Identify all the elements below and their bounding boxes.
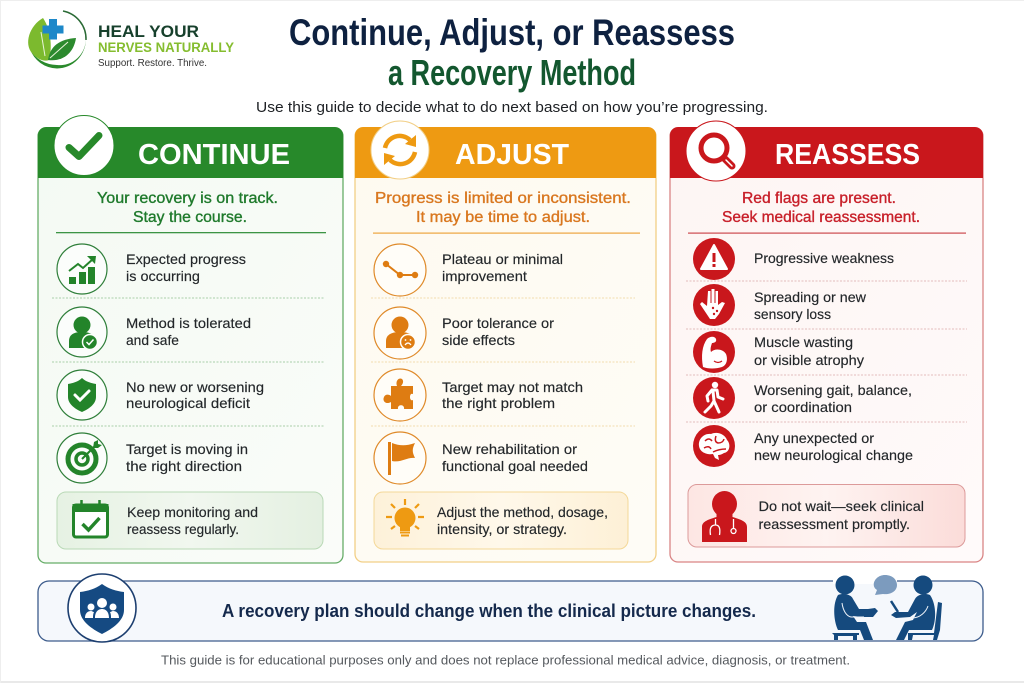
- header band: [670, 127, 983, 178]
- summary: Stay the course.: [133, 209, 247, 226]
- title: [289, 12, 735, 93]
- disclaimer: This guide is for educational purposes only and does not replace professional medical advice, diagnosis, or treatment.: [161, 654, 850, 668]
- item: progressive weakness: [693, 238, 894, 280]
- item: sensory loss: [693, 284, 867, 326]
- logo text: HEAL YOUR: [98, 22, 199, 41]
- item: progressive weakness: Progressive weakness: [754, 250, 894, 266]
- item: expected progress: is occurring: [126, 268, 200, 284]
- item: worsening gait: or coordination: [754, 399, 852, 415]
- item: plateau: [374, 244, 563, 296]
- icon: magnifier badge: [686, 121, 746, 181]
- item: poor tolerance: [374, 307, 554, 359]
- icon: light bulb: [386, 499, 424, 536]
- banner message: A recovery plan should change when the clinical picture changes.: [222, 601, 756, 621]
- callout: do not wait: [688, 484, 965, 547]
- logo: Heal Your Nerves Naturally: [28, 11, 234, 69]
- item: new goal: functional goal needed: [442, 458, 588, 474]
- item: sensory loss: Spreading or new: [754, 289, 867, 305]
- item: target mismatch: the right problem: [442, 395, 555, 411]
- heading: CONTINUE: [138, 139, 290, 171]
- logo text: [98, 22, 234, 69]
- callout: adjust the method: [374, 492, 628, 549]
- item: target moving: [57, 433, 248, 483]
- item: worsening gait: Worsening gait, balance,: [754, 382, 912, 398]
- item: neurological change: new neurological change: [754, 447, 913, 463]
- callout: keep monitoring: [57, 492, 323, 549]
- item: expected progress: [57, 244, 246, 294]
- item: muscle wasting: Muscle wasting: [754, 334, 853, 350]
- panel: continue: [38, 116, 343, 563]
- banner box: [38, 581, 983, 641]
- item: plateau: improvement: [442, 268, 527, 284]
- summary: [722, 190, 920, 226]
- item: muscle wasting: [693, 331, 864, 373]
- icon: two people in conversation: [832, 575, 942, 640]
- panel: adjust: [355, 121, 656, 562]
- icon: doctor: [702, 491, 747, 542]
- summary: [375, 190, 631, 226]
- title: Continue, Adjust, or Reassess: [289, 12, 735, 53]
- callout: adjust the method: intensity, or strategy.: [437, 521, 567, 537]
- panel: reassess: [670, 121, 983, 562]
- item: target mismatch: Target may not match: [442, 379, 583, 395]
- icon: check mark badge: [54, 116, 114, 176]
- panel body: [355, 128, 656, 562]
- item: neurological change: [693, 425, 913, 467]
- item: target moving: the right direction: [126, 458, 242, 474]
- item: new goal: New rehabilitation or: [442, 441, 577, 457]
- callout: adjust the method: Adjust the method, dosage,: [437, 504, 608, 520]
- item: expected progress: Expected progress: [126, 251, 246, 267]
- subtitle: Use this guide to decide what to do next based on how you’re progressing.: [256, 99, 768, 116]
- icon: refresh arrows badge: [371, 121, 429, 179]
- item: worsening gait: [693, 377, 912, 419]
- item: no new deficit: No new or worsening: [126, 379, 264, 395]
- item: no new deficit: [57, 370, 264, 420]
- logo text: Support. Restore. Thrive.: [98, 57, 207, 69]
- callout: do not wait: reassessment promptly.: [758, 516, 910, 532]
- summary: It may be time to adjust.: [416, 209, 590, 226]
- heading: REASSESS: [775, 139, 920, 171]
- title: a Recovery Method: [388, 52, 636, 93]
- summary: Seek medical reassessment.: [722, 209, 920, 226]
- item: poor tolerance: Poor tolerance or: [442, 315, 554, 331]
- icon: calendar: [72, 500, 108, 537]
- summary: Red flags are present.: [742, 190, 896, 207]
- header band: [355, 127, 656, 178]
- callout: keep monitoring: reassess regularly.: [127, 521, 239, 537]
- icon: shield with people: [68, 574, 136, 642]
- item: muscle wasting: or visible atrophy: [754, 352, 864, 368]
- banner: key message: [38, 574, 983, 642]
- summary: [97, 190, 278, 226]
- callout: do not wait: Do not wait—seek clinical: [758, 498, 924, 514]
- item: no new deficit: neurological deficit: [126, 395, 250, 411]
- item: plateau: Plateau or minimal: [442, 251, 563, 267]
- item: neurological change: Any unexpected or: [754, 430, 874, 446]
- logo icon: leaves, cross and ring: [28, 11, 86, 68]
- item: target mismatch: [374, 369, 583, 421]
- item: target moving: Target is moving in: [126, 441, 248, 457]
- header band: [38, 127, 343, 178]
- callout: keep monitoring: Keep monitoring and: [127, 504, 258, 520]
- item: sensory loss: sensory loss: [754, 306, 831, 322]
- summary: Your recovery is on track.: [97, 190, 278, 207]
- item: new goal: [374, 432, 588, 484]
- item: poor tolerance: side effects: [442, 332, 515, 348]
- item: method tolerated: and safe: [126, 332, 179, 348]
- item: method tolerated: [57, 307, 251, 357]
- panel body: [38, 128, 343, 563]
- heading: ADJUST: [455, 139, 569, 171]
- summary: Progress is limited or inconsistent.: [375, 190, 631, 207]
- panel body: [670, 128, 983, 562]
- logo text: NERVES NATURALLY: [98, 40, 234, 55]
- item: method tolerated: Method is tolerated: [126, 315, 251, 331]
